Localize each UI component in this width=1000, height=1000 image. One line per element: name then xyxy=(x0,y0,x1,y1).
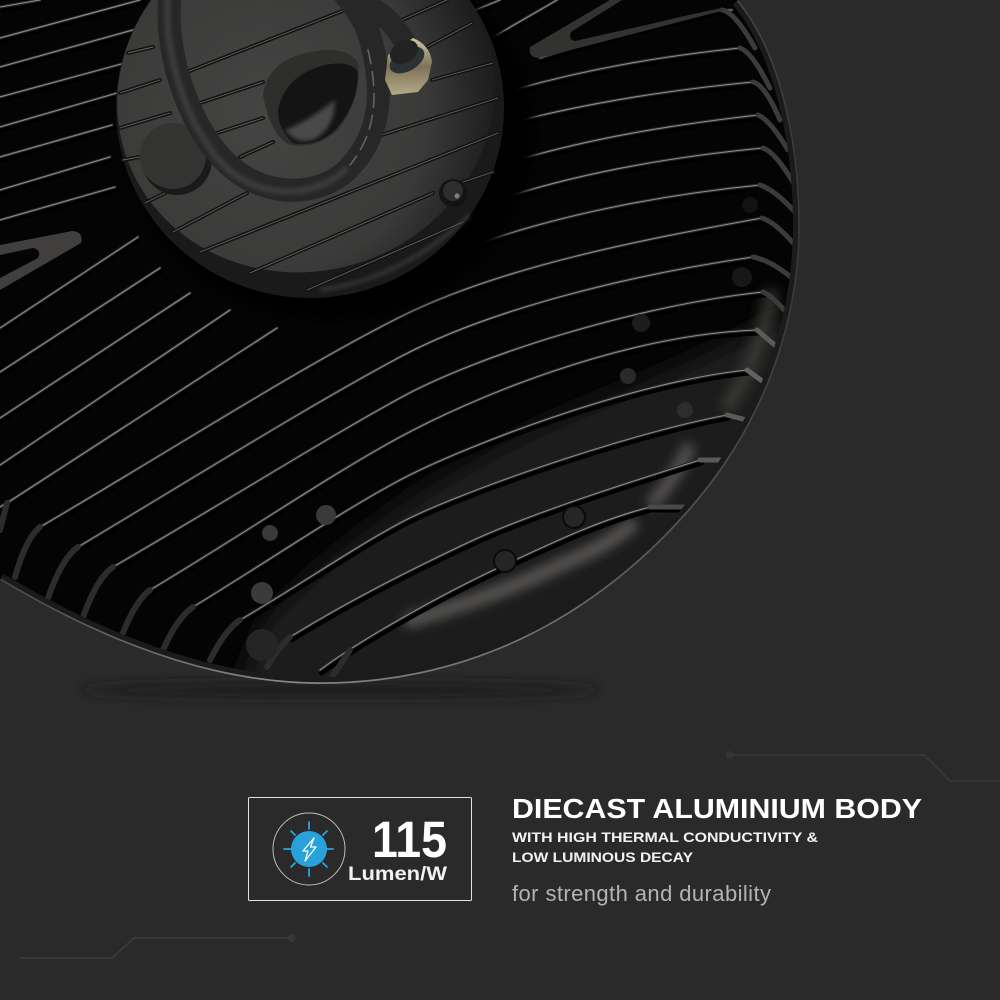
feature subheading: WITH HIGH THERMAL CONDUCTIVITY & xyxy=(512,829,818,845)
badge unit: Lumen/W xyxy=(348,864,447,885)
feature heading: DIECAST ALUMINIUM BODY xyxy=(512,793,922,824)
second housing highlight xyxy=(650,445,690,505)
lower textured housing xyxy=(242,318,782,677)
center cap side wall xyxy=(116,0,504,298)
grommet xyxy=(263,50,359,146)
cooling fins xyxy=(0,0,764,673)
small cap bolt xyxy=(439,179,464,206)
body shadow xyxy=(80,683,600,697)
feature subheading xyxy=(512,829,818,865)
cable loop xyxy=(167,0,414,191)
badge border xyxy=(248,798,472,900)
V rib, top right xyxy=(530,0,725,58)
round plug xyxy=(140,123,212,195)
fin feet, right side xyxy=(650,10,796,507)
brass cable gland xyxy=(385,35,432,95)
badge value: 115 xyxy=(372,811,447,868)
lumen badge xyxy=(248,798,472,900)
right edge glow xyxy=(725,290,772,410)
lamp heat sink body xyxy=(0,0,820,700)
fin feet, left side xyxy=(0,503,350,680)
cap shadow xyxy=(394,4,543,320)
V rib, left xyxy=(0,231,82,290)
feature subheading: LOW LUMINOUS DECAY xyxy=(512,849,694,865)
rim xyxy=(0,0,800,684)
center cap top xyxy=(117,0,484,272)
mounting bolts xyxy=(246,197,758,661)
cap lower sheen xyxy=(320,215,470,290)
icon: sun with lightning bolt xyxy=(273,813,345,885)
circuit line, top right xyxy=(726,751,1000,781)
inner rim band xyxy=(0,0,800,684)
housing highlight xyxy=(405,522,635,622)
feature tagline: for strength and durability xyxy=(512,881,771,906)
cap ribs xyxy=(120,0,498,290)
circuit line, bottom left xyxy=(20,934,296,958)
